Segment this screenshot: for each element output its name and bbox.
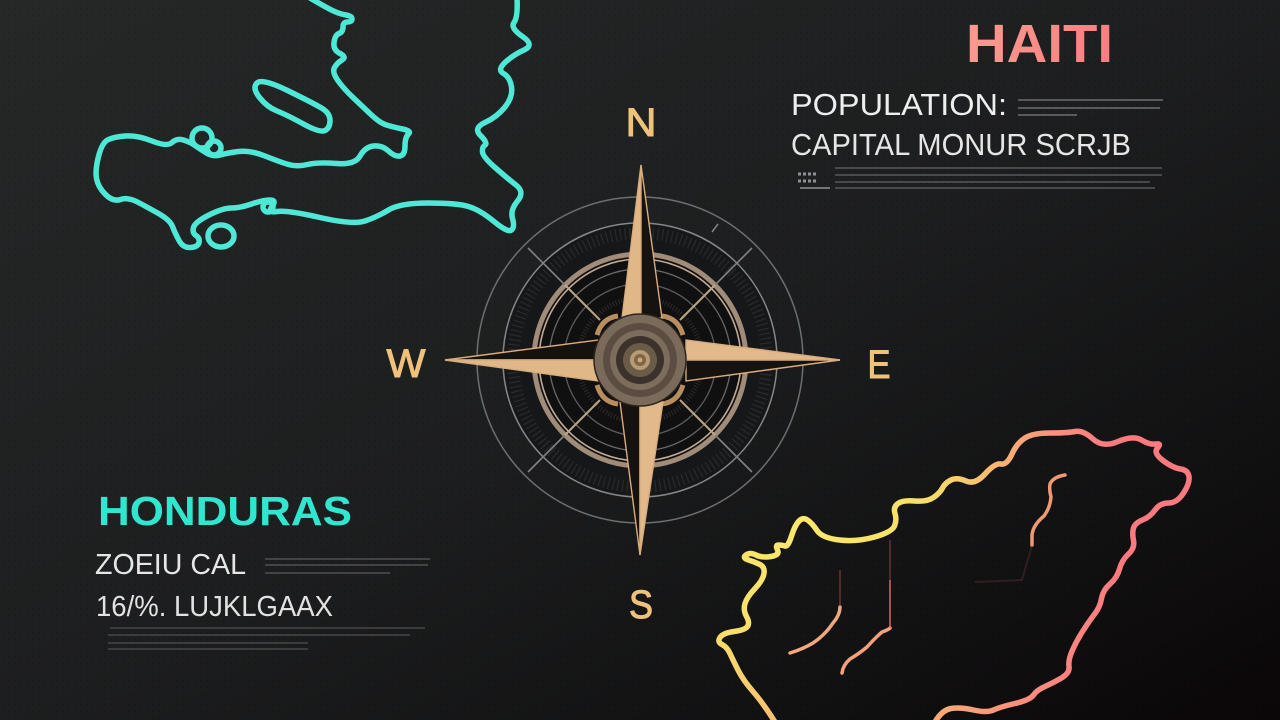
label: population: POPULATION: [791, 87, 1007, 122]
label: first stat: ZOEIU CAL [95, 549, 246, 581]
river: west [790, 607, 840, 653]
fine print lines: second stat [108, 628, 425, 649]
fine print lines: first stat [265, 559, 430, 573]
island: Gonave [255, 82, 330, 131]
panel: Haiti text [791, 14, 1163, 188]
river: central [842, 628, 890, 673]
compass letter E: E [868, 343, 890, 387]
heading: Honduras: HONDURAS [98, 488, 352, 534]
compass star points [445, 165, 840, 555]
label: second stat: 16/%. LUJKLGAAX [96, 591, 333, 623]
map: Haiti outline [96, 0, 529, 248]
compass letter W: W [386, 342, 426, 386]
compass dial rings [477, 197, 803, 523]
river: east [1032, 475, 1065, 545]
map: Honduras outline [719, 431, 1189, 720]
heading: Haiti: HAITI [966, 14, 1113, 74]
label: capital: CAPITAL MONUR SCRJB [791, 127, 1131, 162]
fine print lines: capital [798, 168, 1162, 188]
compass hub [594, 314, 686, 406]
compass letter S: S [629, 583, 653, 627]
island: small southern islet [208, 225, 234, 247]
compass diagonal spokes [528, 224, 752, 472]
compass rose [445, 165, 840, 555]
river: faint red branches [840, 540, 1032, 628]
compass letter N: N [626, 101, 656, 145]
lagoon loops on north coast [192, 128, 273, 212]
compass gold knuckles [597, 316, 683, 404]
panel: Honduras text [95, 488, 430, 649]
fine print lines: population [1018, 100, 1163, 115]
